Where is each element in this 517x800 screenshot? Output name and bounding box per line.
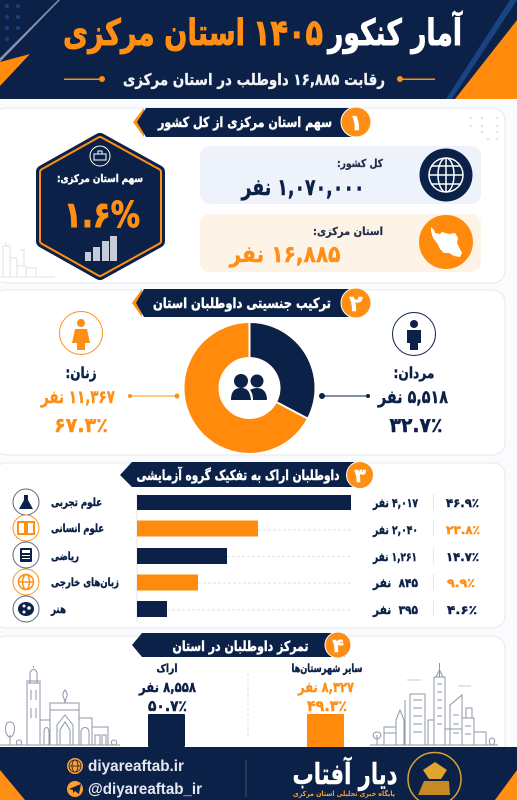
icon: woman [60,312,102,354]
row: art: هنر [50,603,66,616]
icon: iran map [419,215,473,269]
section 2 heading: ترکیب جنسیتی داوطلبان استان [153,296,331,312]
row: foreign languages [13,569,475,595]
hexagon badge: ۱.۶% [64,195,140,236]
row: mathematics [13,542,479,568]
women stats: ۱۱,۳۶۷ نفر [40,387,115,408]
title: استان مرکزی [63,13,245,54]
brand tagline: پایگاه خبری تحلیلی استان مرکزی [293,789,395,798]
row: experimental sciences: ۴۶.۹٪ [446,496,479,510]
hexagon badge: سهم استان مرکزی: [57,173,143,185]
icon: calculator [13,542,39,568]
card: national total: ۱,۰۷۰,۰۰۰ نفر [241,175,364,201]
icon: flask [13,489,39,515]
card: province total: ۱۶,۸۸۵ نفر [229,242,340,268]
title: ۱۴۰۵ [253,13,323,54]
icon: language globe [13,569,39,595]
faded skyline [0,242,55,277]
men stats [377,312,448,437]
connector: men [319,393,370,399]
row: mathematics: ۱۴.۷٪ [446,550,479,564]
men stats: ۵,۵۱۸ نفر [377,387,448,408]
column: other cities [292,662,362,747]
row: art: ۳۹۵ نفر [372,603,418,617]
row: art [13,596,477,622]
row: foreign languages: ۸۴۵ نفر [372,576,418,590]
row: humanities: ۲۳.۸٪ [446,523,480,537]
icon: badge emblem [90,146,110,166]
column: arak: ۸,۵۵۸ نفر [138,680,196,696]
card: province total [200,214,481,272]
section 1 heading: سهم استان مرکزی از کل کشور [157,115,332,131]
row: art: ۴.۶٪ [447,603,477,617]
row: humanities: ۲,۰۴۰ نفر [372,523,418,537]
brand name: دیار آفتاب [292,756,398,791]
section 2 heading [132,288,371,318]
card: national total: کل کشور: [337,157,383,170]
panel 1: provincial share [0,107,505,283]
icon: people [231,374,267,400]
column: other cities: ۸,۳۲۷ نفر [297,680,354,696]
row: mathematics: ریاضی [51,550,79,563]
icon: bar mini chart [85,236,117,261]
column: other cities: ۴۹.۳٪ [307,697,347,715]
logo [408,752,461,800]
hexagon badge [43,140,158,273]
men stats: ۳۲.۷٪ [390,413,442,437]
title: آمار کنکور [327,10,463,54]
horizontal bar chart [136,494,352,622]
card: province total: استان مرکزی: [313,225,383,238]
footer [0,747,517,800]
divider [247,673,249,737]
telegram handle: @diyareaftab_ir [88,781,202,798]
subtitle ornaments [64,76,435,82]
column: arak: اراک [156,662,178,675]
row: humanities [13,515,480,541]
row: experimental sciences [13,489,479,515]
section 3 heading [120,462,374,488]
row: humanities: علوم انسانی [51,522,104,535]
row: foreign languages: زبان‌های خارجی [51,576,119,589]
illustration: modern city skyline [370,663,498,745]
website text: diyareaftab.ir [88,758,184,775]
row: experimental sciences: ۴,۰۱۷ نفر [372,496,419,510]
section 4 heading: تمرکز داوطلبان در استان [172,639,308,655]
header banner [0,0,517,99]
section 3 heading: داوطلبان اراک به تفکیک گروه آزمایشی [136,466,340,484]
icon: telegram [67,781,83,797]
section 4 heading: ۴ [332,635,344,657]
men stats: مردان: [394,364,434,382]
illustration: arak mosque skyline [0,666,120,745]
icon: book [13,515,39,541]
panel 3: exam groups [0,462,505,628]
row: experimental sciences: علوم تجربی [51,496,102,509]
women stats: ۶۷.۳٪ [54,413,108,437]
icon: palette [13,596,39,622]
panel 2: gender composition [0,288,505,455]
donut chart [202,322,314,436]
women stats: زنان: [66,364,96,382]
subtitle: رقابت ۱۶,۸۸۵ داوطلب در استان مرکزی [123,70,385,89]
title [63,10,463,54]
icon: man [392,312,436,356]
section 1 heading [133,107,371,137]
section 1 heading: ۱ [349,111,363,136]
section 2 heading: ۲ [349,292,363,317]
row: foreign languages: ۹.۹٪ [447,576,475,590]
column: arak [138,662,196,747]
row: mathematics: ۱,۲۶۱ نفر [372,550,417,564]
icon: website globe [67,758,83,774]
icon: globe [420,148,472,202]
section 3 heading: ۳ [354,465,366,487]
column: arak: ۵۰.۷٪ [148,697,187,715]
connector: women [128,394,180,398]
column: other cities: سایر شهرستان‌ها [292,662,362,675]
women stats [40,312,115,437]
panel 4: concentration [0,632,505,766]
section 4 heading [132,632,351,658]
card: national total [200,146,481,204]
